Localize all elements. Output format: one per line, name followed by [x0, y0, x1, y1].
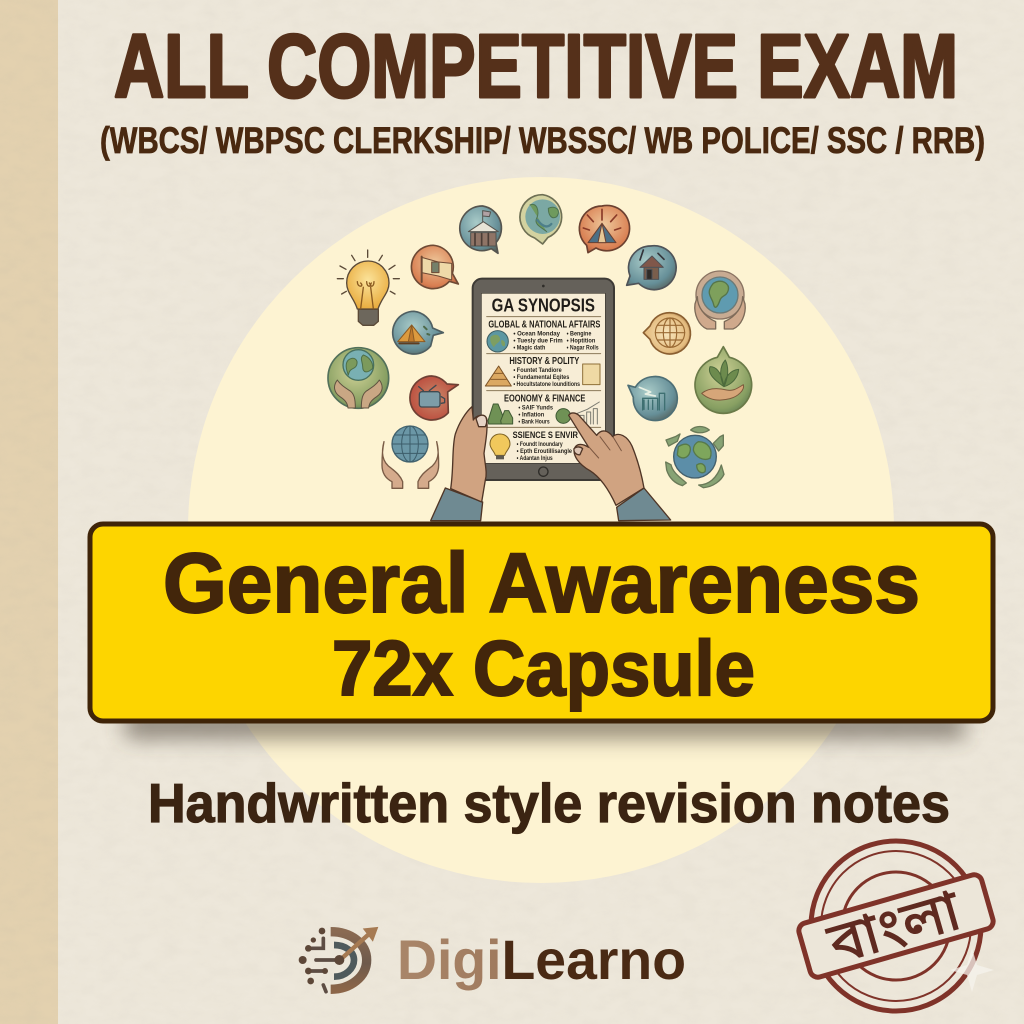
- section: global and national affairs: • Magic dath: [513, 344, 545, 351]
- banner subheading: 72x Capsule: [332, 624, 755, 712]
- icon: pyramid sunburst bubble: [579, 205, 630, 253]
- icon: government building bubble: [460, 206, 501, 253]
- section: global and national affairs: • Tuesly due Frim: [513, 337, 563, 344]
- section: global and national affairs: • Nagar Rolls: [567, 344, 599, 351]
- section: history and polity: [485, 356, 600, 388]
- section: science and environment: • Foundt Inoundary: [517, 441, 563, 448]
- illustration cluster: [328, 195, 752, 521]
- banner heading: General Awareness: [163, 536, 920, 630]
- tablet screen: [481, 293, 605, 463]
- icon: earth with recycling arrows: [666, 426, 724, 488]
- section: global and national affairs: [487, 319, 601, 352]
- screen text: GA Synopsis: GA SYNOPSIS: [492, 294, 595, 315]
- stamp band: [797, 873, 995, 979]
- icon: small globe in open hands: [382, 426, 439, 488]
- section: economy and finance: [488, 393, 599, 425]
- tagline: Handwritten style revision notes: [148, 772, 950, 834]
- logo mark: [299, 928, 377, 992]
- section: history and polity: • Hocultstatone Iounditions: [513, 381, 580, 388]
- section: global and national affairs: • Ocean Monday: [513, 330, 560, 337]
- left binding strip: [0, 0, 58, 1024]
- tablet: [473, 279, 614, 480]
- icon: earth in hands, large: [328, 348, 389, 408]
- stamp label: বাংলা: [820, 876, 972, 987]
- section: economy and finance: • Bank Hours: [518, 418, 550, 425]
- logo: DigiLearno: [299, 928, 686, 992]
- section: science and environment: SSIENCE S ENVIR: [513, 430, 578, 440]
- pale yellow circle: [188, 177, 894, 883]
- stamp glint: [950, 948, 994, 992]
- section: history and polity: • Fundamental Eqites: [513, 374, 570, 381]
- section: economy and finance: EOONOMY & FINANCE: [504, 393, 586, 404]
- section: history and polity: HISTORY & POLITY: [509, 356, 580, 367]
- section: global and national affairs: • Bengine: [567, 330, 592, 337]
- section: global and national affairs: • Hoptition: [567, 337, 595, 344]
- icon: plant in hand bubble: [695, 347, 752, 413]
- section: history and polity: • Fountet Tandiore: [513, 367, 562, 374]
- icon: flag bubble: [411, 245, 458, 289]
- tablet body: [473, 279, 614, 480]
- icon: hut bubble: [627, 246, 676, 290]
- logo wordmark: DigiLearno: [397, 928, 686, 991]
- section: science and environment: [490, 430, 578, 462]
- yellow banner: [90, 524, 993, 721]
- banner shadow: [125, 712, 965, 738]
- icon: bronze globe bubble: [643, 313, 690, 354]
- stamp: Bangla: [797, 841, 995, 1011]
- section: economy and finance: • Inflation: [518, 411, 544, 418]
- left hand and sleeve: [431, 407, 487, 521]
- section: global and national affairs: GLOBAL & NATIONAL AFTAIRS: [488, 319, 601, 330]
- section: science and environment: • Adantan Injus: [517, 455, 553, 462]
- section: economy and finance: • SAIF Yunds: [518, 404, 553, 411]
- icon: tent / pyramid bubble: [393, 311, 443, 354]
- icon: globe in cupped hands: [695, 271, 745, 329]
- icon: tv bubble: [410, 376, 458, 420]
- icon: teal chart bubble: [628, 377, 677, 421]
- icon: light bulb: [337, 250, 399, 325]
- icon: map bubble: [520, 195, 562, 244]
- section: science and environment: • Epth Eroutillisangle: [517, 448, 572, 455]
- right hand and sleeve: [569, 413, 671, 521]
